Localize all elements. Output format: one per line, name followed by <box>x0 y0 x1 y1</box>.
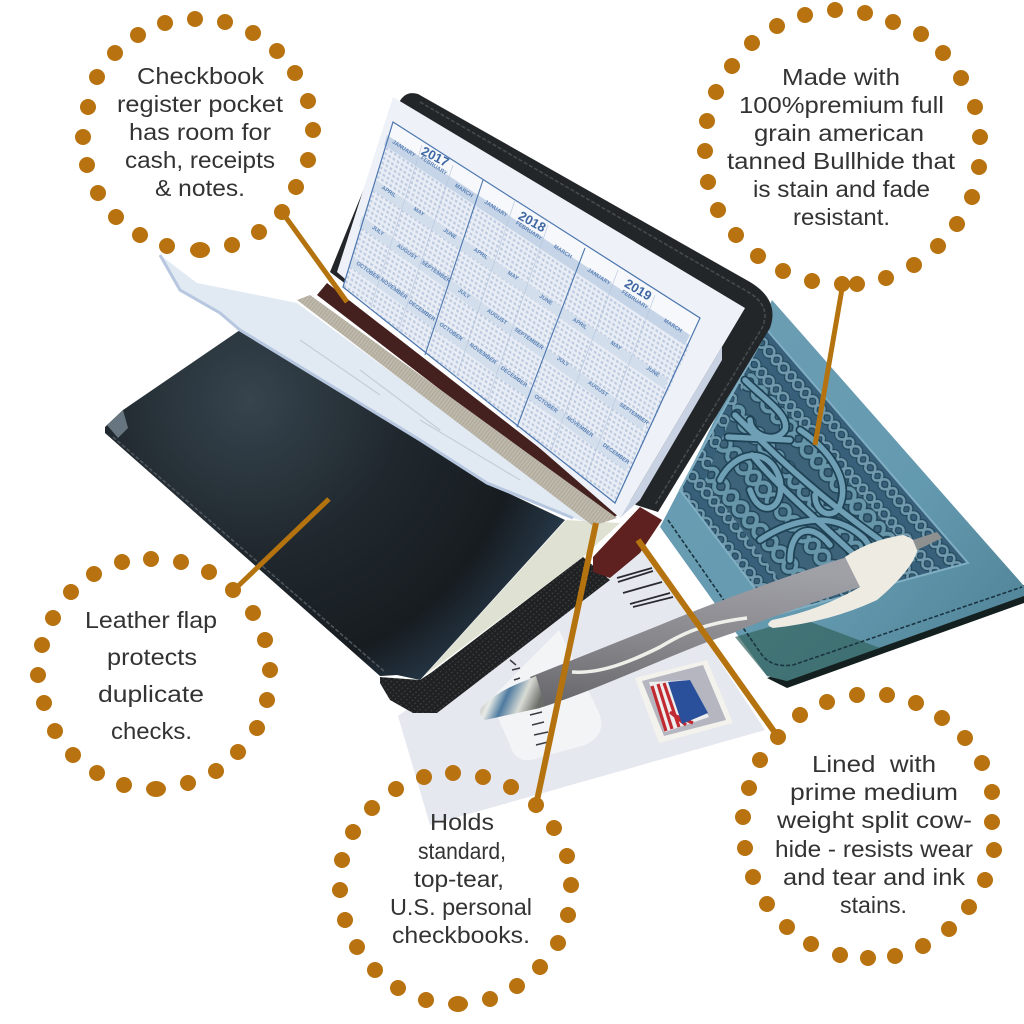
callout text: standard, <box>418 838 506 864</box>
month labels: OCTOBER <box>355 261 380 282</box>
month labels: DECEMBER <box>499 366 528 389</box>
photo: ballpoint pen <box>480 532 942 720</box>
calendar grid <box>343 122 700 503</box>
flap corner <box>107 410 128 438</box>
callout text: and tear and ink <box>783 864 966 890</box>
month labels: AUGUST <box>586 380 609 399</box>
month labels: JUNE <box>442 228 458 241</box>
callout text: prime medium <box>790 779 958 805</box>
callout text: Holds <box>430 809 494 835</box>
callout text: Leather flap <box>85 607 217 633</box>
duplicate checks fanned out <box>160 255 600 526</box>
month labels: AUGUST <box>395 243 418 262</box>
month labels: MAY <box>506 270 519 282</box>
year labels: 2017 <box>419 143 452 170</box>
icon: central Celtic knot <box>720 380 880 575</box>
callout: split cowhide lining <box>735 687 1002 966</box>
month labels: JUNE <box>645 366 661 379</box>
month labels: APRIL <box>380 185 398 200</box>
envelope window <box>490 630 601 760</box>
icon: flag stamp <box>635 660 733 743</box>
leader line: register pocket <box>282 212 347 302</box>
month labels: DECEMBER <box>407 300 436 323</box>
callout text: Lined with <box>812 751 936 777</box>
leather flap <box>105 330 565 680</box>
photo: open checkbook cover <box>105 93 772 713</box>
callout text <box>727 64 956 230</box>
photo: envelope with address bars <box>398 540 765 825</box>
callout text: U.S. personal <box>390 894 532 920</box>
callout text: checkbooks. <box>392 922 530 948</box>
month labels: APRIL <box>571 317 589 332</box>
month labels: JULY <box>370 225 385 238</box>
month labels: OCTOBER <box>533 394 558 415</box>
linen binding strip <box>297 295 617 526</box>
oxblood lining tab <box>593 507 662 578</box>
dotted ring <box>735 687 1002 966</box>
month labels: FEBRUARY <box>620 289 649 311</box>
month labels: DECEMBER <box>601 443 630 466</box>
callout text <box>390 809 532 948</box>
pen barrel <box>530 557 860 707</box>
register calendar page <box>337 97 745 518</box>
callout text: Checkbook <box>137 63 265 89</box>
callout text: Made with <box>782 64 900 90</box>
callout: standard personal checkbooks <box>332 765 579 1012</box>
month labels: APRIL <box>472 247 490 262</box>
month labels: JUNE <box>538 294 554 307</box>
callout text: hide - resists wear <box>775 836 973 862</box>
silver click top <box>913 532 942 550</box>
month labels: SEPTEMBER <box>618 402 649 426</box>
month labels: MARCH <box>453 183 474 199</box>
month labels: JANUARY <box>391 139 417 159</box>
callout text: weight split cow- <box>776 807 972 833</box>
ruler ticks <box>510 660 552 745</box>
callout text: grain american <box>754 120 924 146</box>
callout: full grain bullhide <box>697 2 988 292</box>
calendar grid: 2019 <box>622 276 655 303</box>
calendar grid: 2018 <box>516 208 549 235</box>
month labels: SEPTEMBER <box>513 327 544 351</box>
callout: checkbook register pocket <box>75 11 321 258</box>
leader line: split cowhide lining <box>638 540 778 737</box>
month labels: SEPTEMBER <box>420 260 451 284</box>
callout text: top-tear, <box>414 866 504 892</box>
month labels: JULY <box>555 356 570 369</box>
dotted ring <box>75 11 321 258</box>
oxblood lining strip <box>317 283 622 520</box>
white grip and clip <box>768 535 917 628</box>
dotted ring <box>697 2 988 292</box>
callout: leather flap <box>30 551 278 797</box>
callout text <box>775 751 973 918</box>
month labels: JANUARY <box>483 199 509 219</box>
month labels: MAY <box>412 206 425 218</box>
chrome pen tip <box>480 676 545 720</box>
dotted ring <box>30 551 278 797</box>
callout text: tanned Bullhide that <box>727 148 956 174</box>
callout text: register pocket <box>117 91 284 117</box>
photo: embossed Celtic checkbook cover <box>660 300 1024 688</box>
month labels: AUGUST <box>485 308 508 327</box>
callout text: duplicate <box>98 681 204 707</box>
month labels: NOVEMBER <box>565 415 594 439</box>
cream checkbook edge <box>425 520 620 675</box>
pocket pages behind calendar <box>620 308 745 518</box>
month labels: MARCH <box>662 318 683 334</box>
callout text: resistant. <box>793 204 890 230</box>
callout text: protects <box>107 644 197 670</box>
month labels <box>355 139 683 466</box>
callout text: stains. <box>840 892 907 918</box>
month labels: MAY <box>609 340 622 352</box>
upper leather cover <box>330 93 772 512</box>
callout text: & notes. <box>155 175 245 201</box>
month labels: OCTOBER <box>438 322 463 343</box>
callout text <box>85 607 217 744</box>
month labels: JANUARY <box>586 267 612 287</box>
month labels: FEBRUARY <box>419 155 448 177</box>
dotted ring <box>332 765 579 1012</box>
callout text: checks. <box>111 718 192 744</box>
white wave accent <box>572 618 747 672</box>
callout text: cash, receipts <box>125 147 275 173</box>
callout text: is stain and fade <box>753 176 930 202</box>
callout text <box>117 63 284 201</box>
month labels: JULY <box>456 288 471 301</box>
leader line: bullhide <box>815 283 843 445</box>
month labels: FEBRUARY <box>514 220 543 242</box>
lower black leather edge <box>380 557 610 713</box>
month labels: MARCH <box>552 244 573 260</box>
leader line: standard checkbooks <box>536 523 596 805</box>
leader line: leather flap <box>234 499 329 590</box>
callout text: 100%premium full <box>739 92 944 118</box>
month labels: NOVEMBER <box>379 277 408 301</box>
callout text: has room for <box>129 119 271 145</box>
month labels: NOVEMBER <box>468 342 497 366</box>
